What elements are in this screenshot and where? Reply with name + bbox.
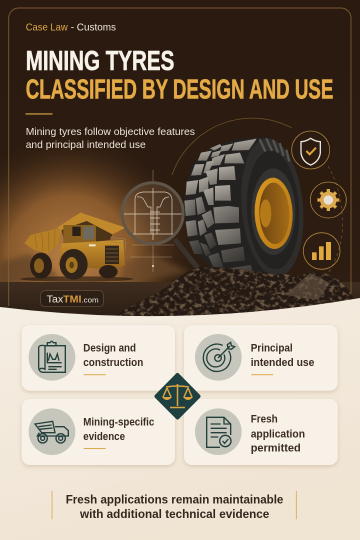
category label: Case Law [26, 23, 68, 34]
handle [176, 241, 197, 267]
closing statement: with additional technical evidence [79, 507, 270, 521]
icon: bar chart [303, 233, 340, 269]
closing statement: Fresh applications remain maintainable [66, 492, 284, 506]
truck wheels [30, 253, 52, 279]
icon: document check [195, 408, 242, 455]
dump truck [20, 213, 133, 282]
card label: permitted [251, 443, 301, 455]
card: fresh application permitted [184, 399, 338, 465]
dirt mound [116, 266, 354, 316]
card label [251, 343, 314, 369]
sidewall [236, 136, 309, 279]
magnifying glass with tyre cross-section [122, 170, 197, 272]
icon: shield check [292, 131, 330, 169]
closing statement [52, 491, 297, 521]
card label: application [251, 428, 305, 440]
brand badge [41, 291, 103, 307]
header frame [9, 8, 351, 306]
title: MINING TYRES [26, 45, 174, 76]
cross-section blueprint [122, 188, 186, 240]
category label: - Customs [71, 23, 116, 34]
icon: clipboard blueprint [29, 334, 75, 381]
background: dark header [0, 0, 360, 330]
decorative arcs [172, 118, 342, 282]
lens guide lines [130, 170, 174, 272]
subtitle: Mining tyres follow objective features [26, 127, 195, 138]
card: design and construction [22, 325, 175, 391]
card label: Principal [251, 343, 293, 355]
background: sunset glow [0, 130, 360, 327]
tyre silhouette [184, 137, 303, 279]
brand badge: TaxTMI.com [47, 295, 99, 306]
tread blocks [184, 139, 257, 277]
card label: Mining-specific [83, 417, 154, 429]
card label: Fresh [251, 413, 278, 425]
card label [251, 413, 305, 455]
icon: scales of justice badge [156, 375, 198, 418]
card label: evidence [83, 431, 125, 443]
card label: intended use [251, 357, 314, 369]
icon: gear [310, 182, 346, 218]
category label [26, 23, 116, 34]
title [26, 45, 333, 104]
card label: construction [83, 357, 144, 369]
card label [83, 343, 144, 369]
mining tyre [184, 136, 309, 279]
top ribs [260, 139, 289, 161]
truck body [24, 228, 62, 254]
card label [83, 417, 154, 443]
lower cream panel [0, 298, 360, 540]
card label: Design and [83, 343, 136, 355]
card: mining-specific evidence [22, 399, 175, 465]
icon: dump truck [29, 408, 75, 455]
status icons [292, 131, 346, 269]
subtitle: and principal intended use [26, 140, 146, 151]
subtitle [26, 127, 195, 151]
icon: target [195, 334, 242, 381]
wheel rim [253, 177, 294, 250]
card: principal intended use [184, 325, 338, 391]
